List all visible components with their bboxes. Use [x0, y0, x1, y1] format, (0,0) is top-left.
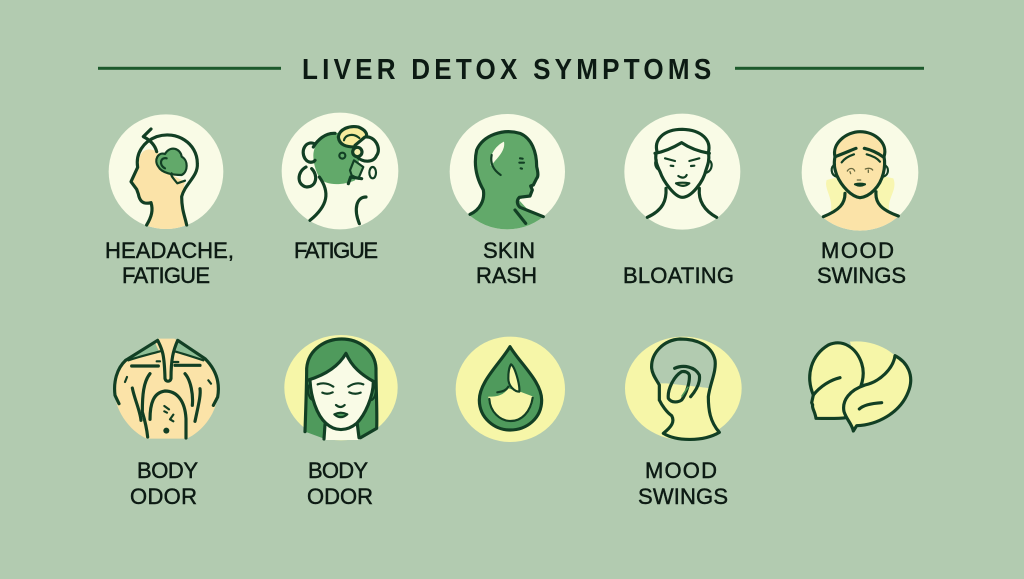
label: mood swings [817, 238, 906, 288]
label: mood swings: SWINGS [817, 263, 906, 288]
icon: neutral face [624, 114, 740, 230]
icon: head with ear [625, 337, 742, 440]
label: headache, fatigue: HEADACHE, [105, 238, 234, 263]
title rule left [98, 67, 281, 70]
label: body odor [130, 458, 198, 509]
label: mood swings: MOOD [821, 238, 894, 263]
title: LIVER DETOX SYMPTOMS [302, 53, 711, 85]
label: headache, fatigue: FATIGUE [122, 263, 210, 288]
icon: head with brain [109, 114, 223, 230]
label: mood swings: MOOD [645, 458, 717, 483]
label: headache, fatigue [105, 238, 234, 288]
icon: head with cloud thoughts [282, 113, 398, 229]
label: body odor: ODOR [130, 484, 197, 509]
icon: water drop [456, 337, 565, 442]
label: skin rash [476, 238, 537, 288]
label: mood swings: SWINGS [638, 484, 728, 509]
label: body odor [307, 458, 373, 509]
label: skin rash: SKIN [483, 238, 535, 263]
label: skin rash: RASH [476, 263, 537, 288]
label: bloating: BLOATING [623, 263, 734, 288]
label: fatigue: FATIGUE [294, 238, 378, 263]
icon: torso [115, 339, 218, 439]
label: body odor: ODOR [307, 484, 373, 509]
infographic canvas [98, 58, 924, 504]
icon: head with skin rash [450, 114, 565, 230]
title group [98, 53, 924, 85]
label: mood swings [638, 458, 728, 509]
label: body odor: BODY [308, 458, 368, 483]
icon: woman with long hair [284, 335, 398, 440]
title rule right [735, 67, 924, 70]
icon: sad face with glow [802, 114, 918, 235]
label: body odor: BODY [137, 458, 198, 483]
icon: face and leaf [810, 341, 911, 431]
